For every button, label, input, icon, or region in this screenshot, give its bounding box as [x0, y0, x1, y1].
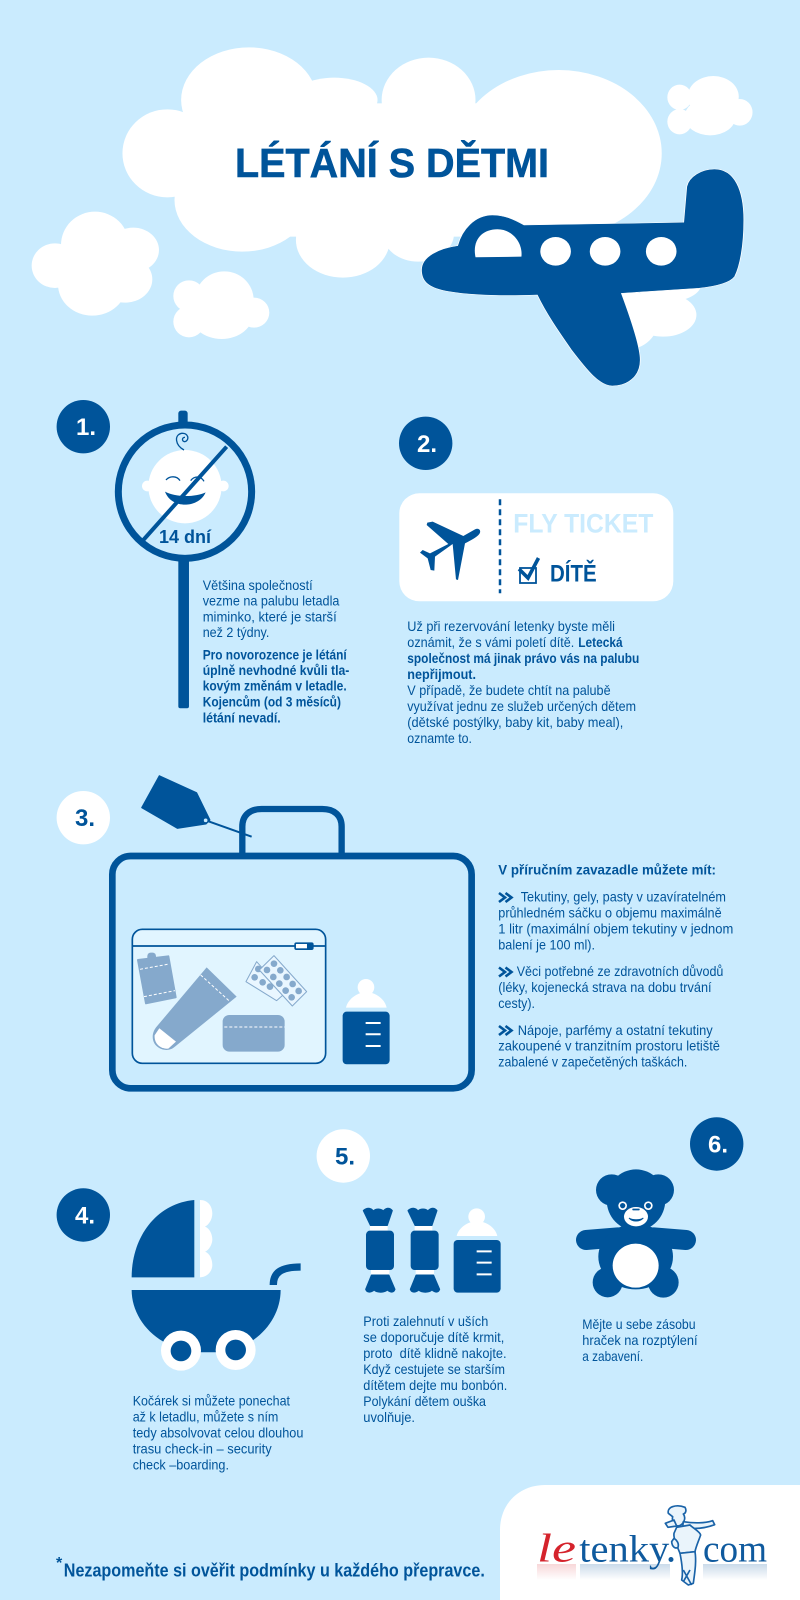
item: baby bottle [343, 979, 390, 1064]
footer note: Nezapomeňte si ověřit podmínky u každého přepravce. [64, 1561, 485, 1581]
text block 2: společnost má jinak právo vás na palubu [407, 651, 639, 666]
number badge 6 [690, 1117, 743, 1171]
text block 3: balení je 100 ml). [498, 937, 595, 952]
text block 1: miminko, které je starší [203, 610, 337, 625]
text block 1: létání nevadí. [203, 710, 281, 725]
text block 3: Nápoje, parfémy a ostatní tekutiny [518, 1023, 713, 1038]
suitcase body [112, 856, 472, 1088]
text block 1: Většina společností [203, 578, 313, 593]
text block 6: hraček na rozptýlení [582, 1333, 698, 1348]
logo wordmark: com [703, 1529, 767, 1571]
text block 3: průhledném sáčku o objemu maximálně [498, 906, 722, 921]
ticket perforation [499, 499, 501, 593]
number badge 5: 5. [335, 1144, 355, 1170]
text block 3: zabalené v zapečetěných taškách. [498, 1055, 687, 1070]
text block 2 [407, 619, 639, 746]
ticket card [399, 493, 673, 601]
cloud behind plane wing [597, 265, 702, 349]
text block 3 [498, 862, 733, 1070]
text block 1: vezme na palubu letadla [203, 594, 340, 609]
text block 2: Letecká [578, 635, 623, 650]
item: jar [138, 953, 176, 1003]
luggage tag [142, 776, 252, 837]
number badge 3 [57, 791, 110, 844]
text block 5: proto dítě klidně nakojte. [363, 1346, 507, 1361]
text block 1: Kojencům (od 3 měsíců) [203, 695, 341, 710]
transparent bag [132, 929, 326, 1063]
number badge 4 [57, 1188, 110, 1242]
ticket heading: FLY TICKET [513, 508, 654, 538]
text block 5: Polykání dětem ouška [363, 1394, 486, 1409]
icon: teddy bear [586, 1169, 686, 1298]
icon: airplane [421, 169, 744, 386]
header: clouds, title and plane [32, 47, 753, 386]
text block 3: 1 litr (maximální objem tekutiny v jednom [498, 922, 733, 937]
text block 1: kovým změnám v letadle. [203, 679, 347, 694]
text block 6: Mějte u sebe zásobu [582, 1317, 696, 1332]
sign label: 14 dní [159, 527, 212, 547]
text block 2: oznamte to. [407, 731, 472, 746]
panel 4: stroller [57, 1188, 303, 1473]
footer note: * [56, 1555, 63, 1572]
text block 2: Už při rezervování letenky byste měli [407, 619, 615, 634]
logo wordmark: le [537, 1526, 576, 1571]
text block 6: a zabavení. [582, 1349, 643, 1364]
text block 3: Tekutiny, gely, pasty v uzavíratelném [521, 890, 726, 905]
number badge 1 [57, 400, 110, 453]
ticket label: child: DÍTĚ [550, 560, 597, 588]
text block 4: až k letadlu, můžete s ním [133, 1410, 278, 1425]
panel 6: toys [582, 1117, 743, 1364]
number badge 2 [399, 417, 452, 470]
text block 2: oznámit, že s vámi poletí dítě. [407, 635, 574, 650]
text block 4: trasu check-in – security [133, 1442, 272, 1457]
number badge 4: 4. [75, 1202, 95, 1230]
text block 3: V příručním zavazadle můžete mít: [498, 862, 716, 877]
item: tube [153, 967, 237, 1050]
text block 6 [582, 1317, 698, 1364]
number badge 5 [317, 1129, 370, 1183]
text block 5: Když cestujete se starším [363, 1362, 505, 1377]
text block 1 [203, 578, 349, 725]
candy 1 [364, 1209, 395, 1292]
text block 5: Proti zalehnutí v uších [363, 1314, 488, 1329]
text block 5: se doporučuje dítě krmit, [363, 1330, 504, 1345]
logo background [500, 1485, 800, 1600]
panel 3: hand luggage [57, 776, 733, 1088]
item: blister packs [246, 956, 307, 1006]
number badge 6: 6. [708, 1132, 728, 1158]
text block 2: (dětské postýlky, baby kit, baby meal), [407, 715, 623, 730]
text block 3: zakoupené v tranzitním prostoru letiště [498, 1039, 720, 1054]
text block 4: check –boarding. [133, 1458, 229, 1473]
candy 2 [408, 1209, 439, 1292]
icon: checkbox [519, 558, 538, 583]
text block 5: uvolňuje. [363, 1410, 415, 1425]
large cloud [122, 47, 662, 278]
icon: candies and bottle [364, 1208, 501, 1293]
bottle [454, 1208, 501, 1293]
panel 5: feeding [317, 1129, 507, 1425]
number badge 3: 3. [75, 805, 95, 832]
text block 1: úplně nevhodné kvůli tla- [203, 663, 349, 678]
text block 5: dítětem dejte mu bonbón. [363, 1378, 507, 1393]
text block 3: Věci potřebné ze zdravotních důvodů [517, 964, 723, 979]
number badge 1: 1. [76, 414, 96, 441]
title: LÉTÁNÍ S DĚTMI [235, 140, 549, 186]
text block 4: tedy absolvovat celou dlouhou [133, 1426, 303, 1441]
icon: ticket plane [420, 522, 480, 580]
text block 3: cesty). [498, 996, 535, 1011]
icon: stroller [132, 1200, 301, 1371]
number badge 2: 2. [417, 431, 437, 458]
text block 2: nepřijmout. [407, 667, 476, 682]
text block 3: (léky, kojenecká strava na dobu trvání [498, 980, 712, 995]
logo reflection [537, 1564, 767, 1580]
panel 1: minimum age [57, 400, 349, 725]
icon: suitcase with contents [112, 776, 472, 1088]
text block 1: Pro novorozence je létání [203, 647, 348, 662]
logo panel [500, 1485, 800, 1600]
small cloud top right [667, 76, 753, 135]
text block 1: než 2 týdny. [203, 625, 269, 640]
text block 4 [133, 1394, 303, 1473]
text block 2: V případě, že budete chtít na palubě [407, 683, 611, 698]
logo figure [665, 1506, 715, 1585]
text block 4: Kočárek si můžete ponechat [133, 1394, 290, 1409]
text block 5 [363, 1314, 507, 1425]
logo wordmark [537, 1526, 767, 1571]
item: wallet [223, 1015, 285, 1052]
icon: no-baby road sign [118, 411, 252, 708]
cloud left [32, 212, 159, 316]
panel 2: ticket [399, 417, 673, 746]
cloud lower middle [173, 271, 269, 339]
logo wordmark: tenky [579, 1529, 669, 1571]
suitcase handle [242, 809, 342, 855]
text block 2: využívat jednu ze služeb určených dětem [407, 699, 636, 714]
